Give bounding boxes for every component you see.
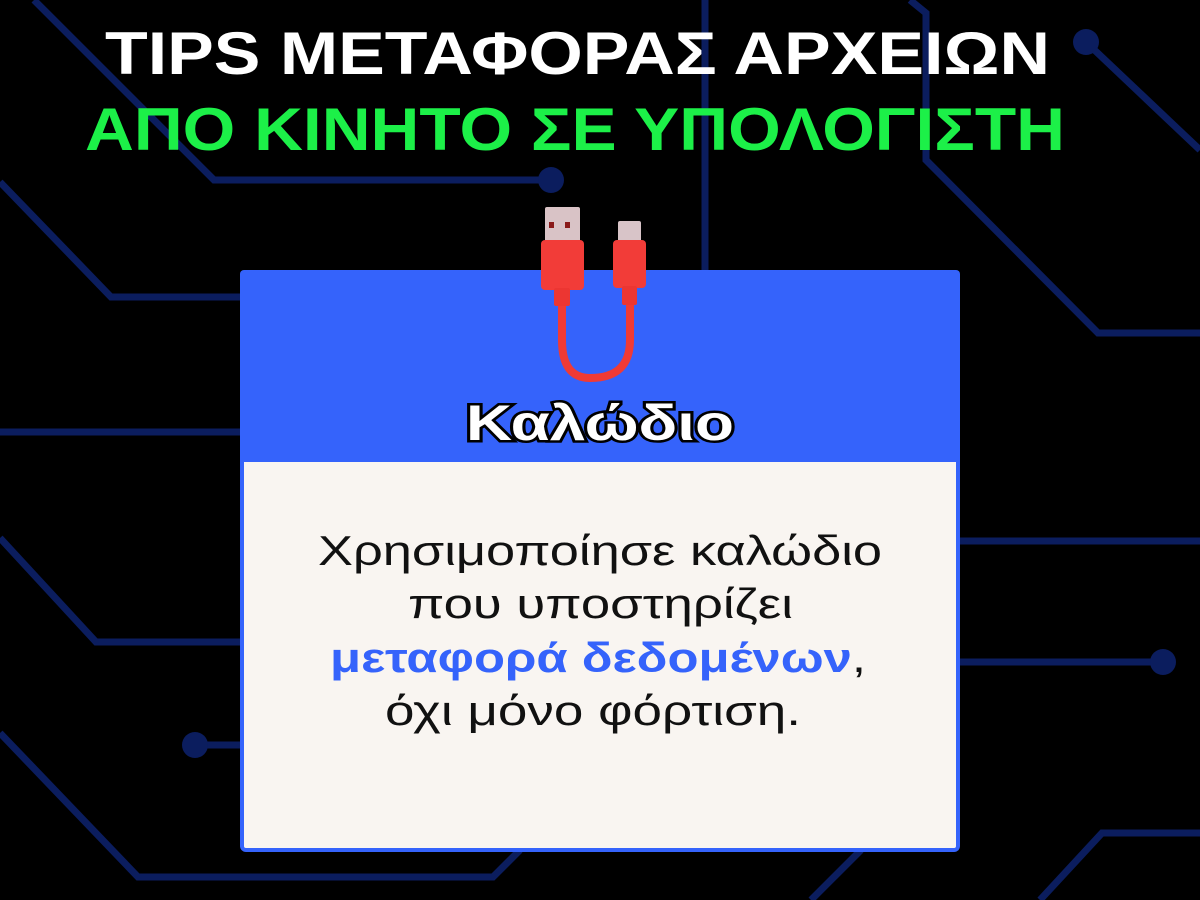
title: [85, 20, 1065, 163]
text block: tip: όχι μόνο φόρτιση.: [385, 687, 801, 734]
title line 1: TIPS ΜΕΤΑΦΟΡΑΣ ΑΡΧΕΙΩΝ: [105, 20, 1050, 87]
panel: cable tip: [240, 270, 960, 852]
heading: Καλώδιο: Καλώδιο: [466, 395, 734, 451]
panel header: [240, 270, 960, 462]
text block: tip: που υποστηρίζει: [408, 580, 793, 627]
text block: tip: Χρησιμοποίησε καλώδιο: [318, 527, 882, 574]
text block: tip: μεταφορά δεδομένων ,: [330, 634, 866, 681]
title line 2: ΑΠΟ ΚΙΝΗΤΟ ΣΕ ΥΠΟΛΟΓΙΣΤΗ: [85, 96, 1065, 163]
panel body: [240, 462, 960, 852]
